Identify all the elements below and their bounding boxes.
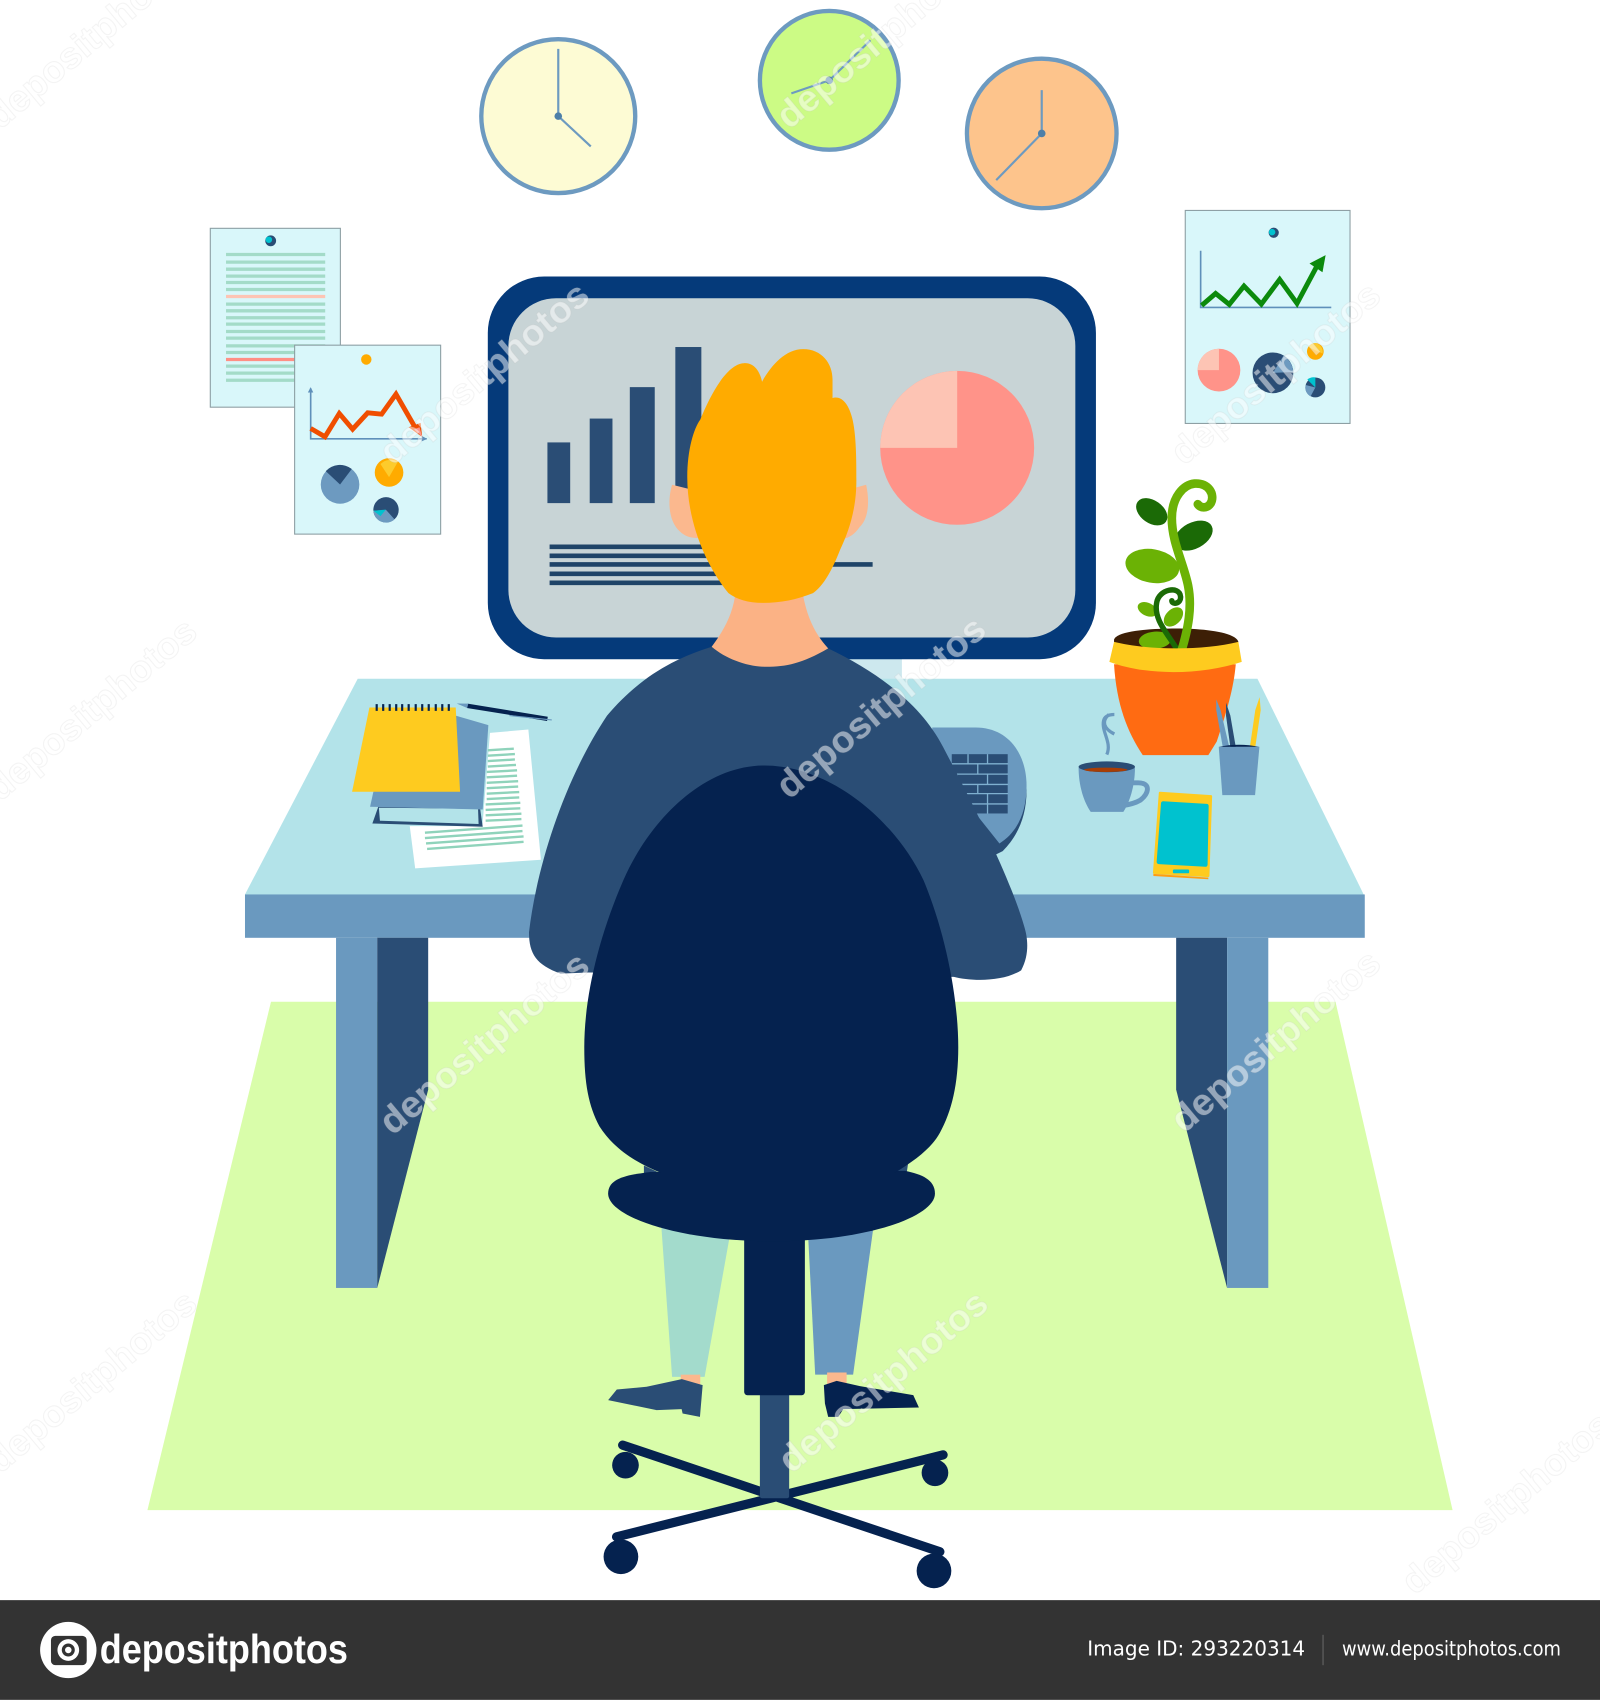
screen text lines — [550, 547, 873, 583]
rug — [147, 1002, 1453, 1510]
book stack — [370, 716, 488, 827]
monitor — [488, 277, 1096, 683]
wall chart: rising line — [1185, 210, 1350, 423]
clock: green — [760, 11, 899, 150]
pencil cup — [1216, 697, 1261, 795]
smartphone — [1153, 793, 1211, 879]
ankles — [681, 1372, 847, 1386]
chair stem — [744, 1230, 805, 1395]
coffee cup — [1079, 714, 1147, 812]
backrest — [584, 765, 958, 1173]
watermarks: depositphotos — [371, 944, 597, 1142]
trouser legs — [644, 1161, 908, 1377]
pen — [457, 703, 552, 720]
watermarks: depositphotos — [1163, 942, 1388, 1140]
footer bar — [0, 1600, 1600, 1700]
clock: cream — [481, 39, 635, 193]
loose paper — [410, 729, 541, 868]
screen bar chart — [547, 347, 701, 503]
spiral notebook — [352, 704, 460, 792]
person — [529, 349, 1027, 1417]
seat — [608, 1171, 935, 1241]
keyboard — [932, 728, 1027, 857]
wall chart: falling line — [295, 345, 441, 534]
office chair — [584, 765, 958, 1588]
pot body — [1114, 664, 1236, 755]
image id: Image ID: 293220314 — [1087, 1636, 1305, 1660]
hair — [687, 349, 856, 603]
gas lift — [760, 1393, 789, 1498]
shoes — [608, 1379, 919, 1417]
footer logo icon — [40, 1622, 96, 1678]
neck — [712, 596, 828, 667]
screen pie chart — [880, 371, 1034, 525]
ears — [669, 485, 868, 539]
soil — [1114, 629, 1238, 651]
plant pot — [1109, 484, 1242, 755]
watermarks: depositphotos — [768, 608, 994, 806]
pot rim — [1109, 642, 1242, 672]
wall note: text document — [210, 228, 340, 407]
watermarks: depositphotos — [770, 1282, 996, 1481]
plant — [1123, 484, 1218, 652]
watermarks: depositphotos — [1163, 274, 1388, 472]
chair base — [604, 1445, 951, 1588]
footer logo text: depositphotos — [100, 1626, 348, 1672]
sweater — [529, 647, 1027, 980]
clock: orange — [967, 59, 1117, 208]
desk — [245, 679, 1365, 1288]
website url: www.depositphotos.com — [1342, 1636, 1561, 1660]
watermarks: depositphotos — [371, 274, 597, 472]
